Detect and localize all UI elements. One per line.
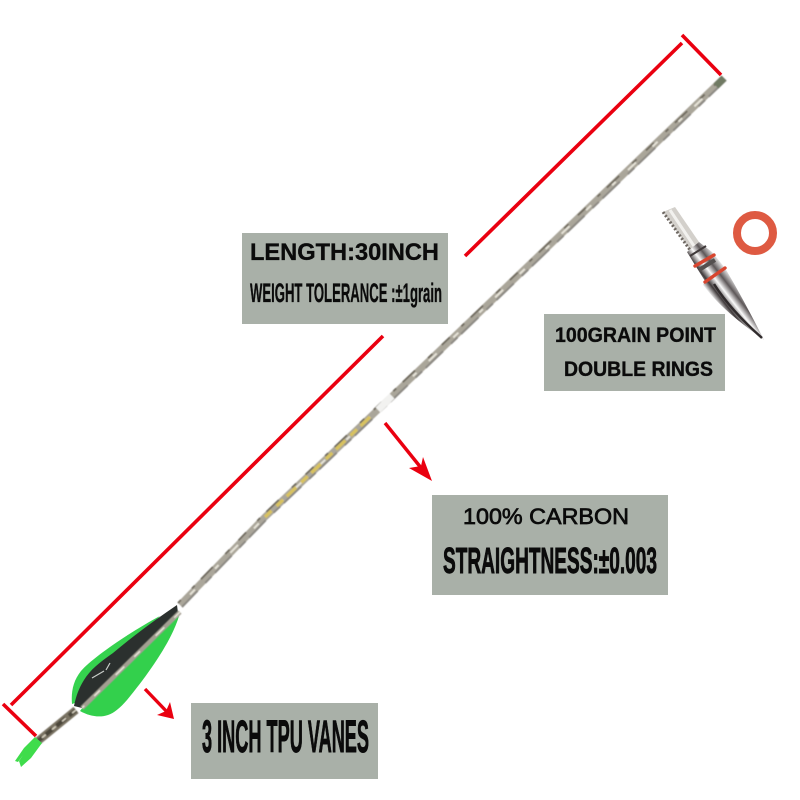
steel bullet body [687,242,764,340]
threaded stud [663,207,699,250]
panel: length and weight [242,233,448,324]
green nock [15,737,42,767]
point: 100 grain field point [663,207,773,340]
heading: grain point: 100GRAIN POINT [555,324,716,347]
spare O-ring [737,215,773,251]
panel: vanes [191,703,378,779]
callout arrow: vanes [145,689,174,719]
heading: length: LENGTH:30INCH [250,239,439,266]
panel: point and rings [544,314,725,391]
callout arrow: carbon shaft [385,423,432,481]
length dimension lines [3,35,721,736]
panel: carbon and straightness [432,495,668,595]
heading: carbon: 100% CARBON [463,504,629,529]
arrow shaft with camo pattern [38,78,726,741]
double red rings [695,255,725,282]
green bottom vane [80,616,179,716]
green upper vane edge [72,616,160,704]
arrow: full carbon arrow [15,78,726,767]
black cock vane [74,605,178,708]
panel: length and weight: WEIGHT TOLERANCE :±1grain [250,278,442,308]
text: 3 INCH TPU VANES [202,711,369,762]
text: double rings: DOUBLE RINGS [564,358,713,381]
vane logo [92,663,110,678]
